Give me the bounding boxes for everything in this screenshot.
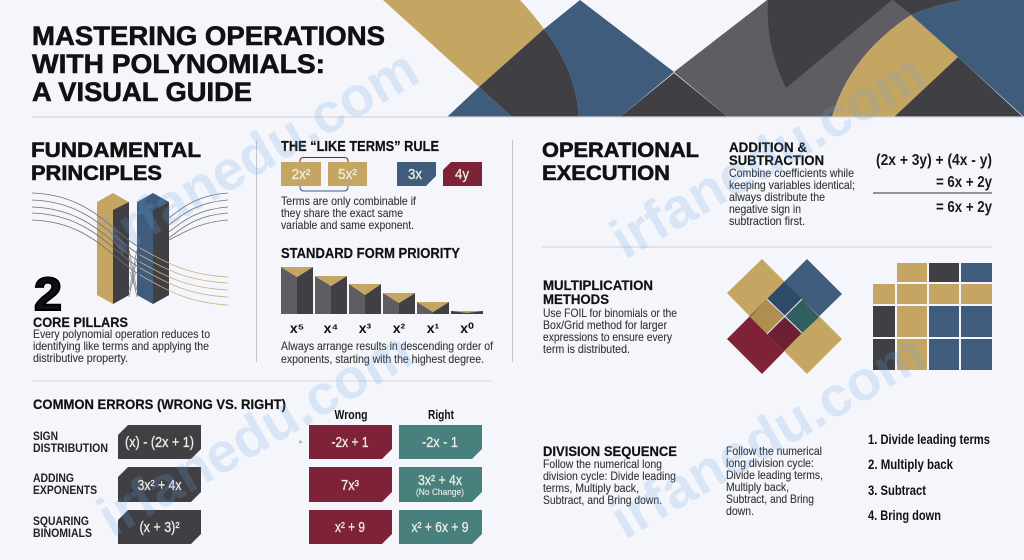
addition worked example — [873, 152, 992, 216]
title: MASTERING OPERATIONS — [32, 21, 385, 51]
numbered division steps — [868, 431, 990, 523]
like terms tiles — [281, 158, 482, 191]
watermarks: irfanedu.com — [600, 40, 936, 270]
box grid — [873, 263, 992, 370]
division text: DIVISION SEQUENCE — [543, 444, 677, 459]
like terms description: Terms are only combinable if — [281, 194, 417, 208]
expression boxes: 3x² + 4x — [138, 478, 182, 494]
core pillars text: Every polynomial operation reduces to — [33, 327, 210, 341]
wrong answers: x² + 9 — [335, 520, 365, 536]
division text — [543, 444, 677, 507]
division text: division cycle: Divide leading — [543, 469, 676, 483]
expression boxes: (x + 3)² — [140, 520, 180, 536]
FOIL overlapping squares — [727, 259, 842, 374]
wrong answers: -2x + 1 — [332, 435, 368, 451]
small arrow — [299, 440, 303, 444]
addition and subtraction text — [729, 140, 855, 228]
like terms description — [281, 194, 417, 232]
title: WITH POLYNOMIALS: — [32, 49, 325, 79]
division text repeat: long division cycle: — [726, 456, 814, 470]
multiplication text: Use FOIL for binomials or the — [543, 306, 677, 320]
division text repeat — [726, 444, 823, 518]
heading: operational execution — [542, 138, 699, 185]
bar labels: x⁰ — [460, 320, 474, 336]
descending bars chart — [281, 267, 483, 314]
heading: fundamental principles: PRINCIPLES — [31, 161, 162, 185]
numbered division steps: 1. Divide leading terms — [868, 431, 990, 447]
bar labels: x⁵ — [290, 320, 304, 336]
core pillars text — [33, 315, 210, 365]
right answers: 3x² + 4x — [418, 473, 463, 489]
addition and subtraction text: keeping variables identical; — [729, 178, 855, 192]
bar labels — [290, 320, 474, 336]
error row labels: EXPONENTS — [33, 483, 97, 497]
heading: fundamental principles: FUNDAMENTAL — [31, 138, 201, 162]
like terms tiles: 5x² — [338, 167, 357, 183]
right answers: (No Change) — [416, 487, 464, 497]
watermarks: irfanedu.com — [86, 318, 423, 548]
right answers — [399, 425, 482, 544]
addition and subtraction text: Combine coefficients while — [729, 166, 854, 180]
division text repeat: Follow the numerical — [726, 444, 822, 458]
standard form description: Always arrange results in descending order of — [281, 339, 494, 353]
heading: like terms rule: THE “LIKE TERMS” RULE — [281, 139, 439, 155]
division text repeat: Divide leading terms, — [726, 468, 823, 482]
watermarks: irfanedu.com — [600, 320, 936, 550]
addition and subtraction text: subtraction first. — [729, 214, 805, 228]
bar labels: x⁴ — [324, 320, 338, 336]
multiplication text: expressions to ensure every — [543, 330, 672, 344]
like terms tiles: 2x² — [292, 167, 311, 183]
heading: operational execution: OPERATIONAL — [542, 138, 699, 162]
expression boxes — [118, 425, 201, 544]
right answers: -2x - 1 — [422, 435, 458, 451]
division text: Subtract, and Bring down. — [543, 493, 662, 507]
multiplication text — [543, 278, 677, 356]
watermarks: irfanedu.com — [92, 36, 429, 266]
heading: fundamental principles — [31, 138, 201, 185]
error row labels — [33, 429, 108, 540]
right answers: x² + 6x + 9 — [412, 520, 468, 536]
addition worked example: = 6x + 2y — [936, 174, 992, 191]
standard form description — [281, 339, 494, 366]
error row labels: ADDING — [33, 471, 74, 485]
multiplication text: METHODS — [543, 292, 609, 307]
icon: two pillars with woven lines — [32, 193, 228, 305]
core pillars text: identifying like terms and applying the — [33, 339, 209, 353]
error row labels: SQUARING — [33, 514, 89, 528]
error row labels: DISTRIBUTION — [33, 441, 108, 455]
multiplication text: MULTIPLICATION — [543, 278, 653, 293]
column labels: Wrong — [334, 407, 368, 422]
standard form description: exponents, starting with the highest degree. — [281, 352, 484, 366]
addition worked example: (2x + 3y) + (4x - y) — [876, 152, 992, 169]
multiplication text: term is distributed. — [543, 342, 630, 356]
wrong answers: 7x³ — [341, 478, 359, 494]
division text repeat: Subtract, and Bring — [726, 492, 814, 506]
addition worked example: = 6x + 2y — [936, 199, 992, 216]
division text: Follow the numerical long — [543, 457, 662, 471]
title: A VISUAL GUIDE — [32, 77, 252, 107]
addition and subtraction text: always distribute the — [729, 190, 825, 204]
like terms description: variable and same exponent. — [281, 218, 414, 232]
core pillars text: distributive property. — [33, 351, 128, 365]
division text repeat: Multiply back, — [726, 480, 789, 494]
stat number: 2: 2 — [34, 268, 62, 320]
watermarks — [86, 36, 936, 550]
like terms description: they share the exact same — [281, 206, 403, 220]
error row labels: BINOMIALS — [33, 526, 92, 540]
addition and subtraction text: negative sign in — [729, 202, 801, 216]
addition and subtraction text: ADDITION & — [729, 140, 807, 155]
bar labels: x¹ — [427, 320, 440, 336]
heading: standard form priority: STANDARD FORM PRIORITY — [281, 246, 460, 262]
column labels: Right — [428, 407, 455, 422]
error row labels: SIGN — [33, 429, 58, 443]
division text repeat: down. — [726, 504, 754, 518]
heading: common errors: COMMON ERRORS (WRONG VS. RIGHT) — [33, 396, 286, 412]
bar labels: x³ — [359, 320, 372, 336]
numbered division steps: 2. Multiply back — [868, 456, 953, 472]
header geometric art — [383, 0, 1024, 117]
heading: operational execution: EXECUTION — [542, 161, 670, 185]
core pillars text: CORE PILLARS — [33, 315, 128, 330]
column labels — [334, 407, 455, 422]
bar labels: x² — [393, 320, 406, 336]
like terms tiles: 4y — [455, 167, 470, 183]
like terms tiles: 3x — [408, 167, 423, 183]
wrong answers — [309, 425, 392, 544]
numbered division steps: 3. Subtract — [868, 482, 926, 498]
division text: terms, Multiply back, — [543, 481, 639, 495]
numbered division steps: 4. Bring down — [868, 507, 941, 523]
addition and subtraction text: SUBTRACTION — [729, 153, 824, 168]
title — [32, 21, 385, 107]
expression boxes: (x) - (2x + 1) — [125, 435, 194, 451]
multiplication text: Box/Grid method for larger — [543, 318, 667, 332]
